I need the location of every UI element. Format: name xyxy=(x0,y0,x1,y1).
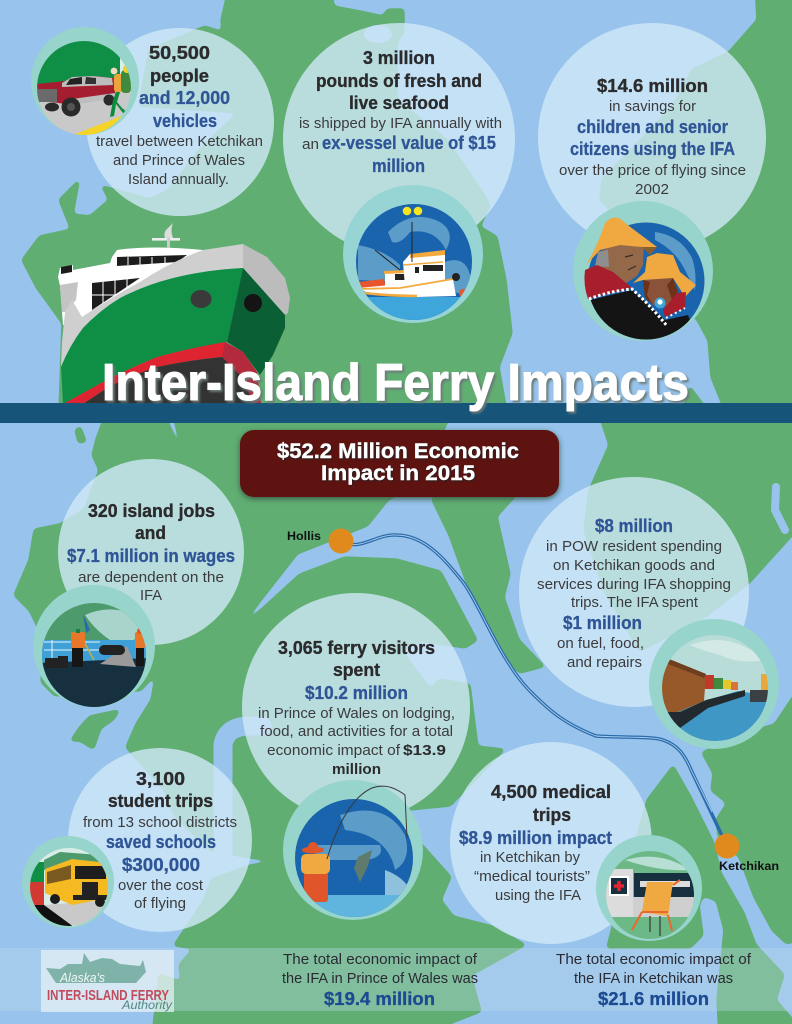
stat text: in POW resident spending xyxy=(546,538,722,555)
panel: student trips xyxy=(22,748,252,932)
stat text: economic impact of xyxy=(267,742,401,759)
stat text: of flying xyxy=(134,895,186,912)
panel: children and senior savings xyxy=(538,23,766,345)
stat text: $13.9 xyxy=(403,742,446,759)
map: inland water channels xyxy=(223,25,785,860)
stat text: an xyxy=(302,136,319,153)
panel: ferry visitors xyxy=(242,593,470,925)
bubble xyxy=(538,23,766,251)
stat text: in savings for xyxy=(609,98,696,115)
stat text: in Prince of Wales on lodging, xyxy=(258,705,455,722)
stat text: and Prince of Wales xyxy=(113,152,245,169)
title: Inter-Island Ferry Impacts xyxy=(102,354,689,412)
stat text: million xyxy=(372,156,425,176)
Hollis marker: Hollis xyxy=(287,529,321,543)
bubble xyxy=(68,748,252,932)
stat text: 3,065 ferry visitors xyxy=(278,638,435,658)
economic impact callout: $52.2 Million Economic xyxy=(277,440,519,463)
stat text: over the cost xyxy=(118,877,204,894)
stat text: trips xyxy=(533,805,571,825)
bubble xyxy=(519,477,749,707)
Ketchikan total: the IFA in Ketchikan was xyxy=(574,970,733,987)
stat text: people xyxy=(150,66,209,86)
stat text: 3,100 xyxy=(136,769,185,789)
logo: Inter-Island Ferry Authority xyxy=(41,950,174,1012)
icon: fishing boat xyxy=(343,185,483,327)
icon: elder and child in woven hats xyxy=(573,201,713,345)
logo: Inter-Island Ferry Authority: Alaska's xyxy=(59,970,105,985)
icon: ambulance and wheelchair xyxy=(596,835,702,945)
stat text xyxy=(459,782,612,904)
economic impact callout: Impact in 2015 xyxy=(321,462,475,485)
stat text: million xyxy=(332,761,381,778)
stat text xyxy=(559,76,746,198)
stat text: from 13 school districts xyxy=(83,814,237,831)
stat text: using the IFA xyxy=(495,887,581,904)
stat text: on Ketchikan goods and xyxy=(553,557,715,574)
ferry illustration xyxy=(58,223,290,404)
Ketchikan marker: Ketchikan xyxy=(719,859,779,873)
stat text: $1 million xyxy=(563,613,642,633)
panel: people and vehicles xyxy=(30,27,274,216)
panel: seafood xyxy=(283,23,515,327)
stat text: $8 million xyxy=(595,516,673,536)
panel: island jobs xyxy=(33,459,244,712)
stat text: “medical tourists” xyxy=(474,868,590,885)
stat text: services during IFA shopping xyxy=(537,576,731,593)
Prince of Wales total xyxy=(282,951,478,1009)
stat text: student trips xyxy=(108,791,213,811)
icon: school bus xyxy=(22,836,115,930)
stat text xyxy=(537,516,731,671)
bubble xyxy=(86,28,274,216)
logo: Inter-Island Ferry Authority: INTER-ISLAND FERRY xyxy=(47,987,169,1004)
icon: deck workers xyxy=(33,585,155,712)
stat text: trips. The IFA spent xyxy=(571,594,699,611)
stat text xyxy=(67,501,235,604)
Ketchikan marker xyxy=(714,834,779,873)
bubble xyxy=(450,742,652,944)
stat text: $7.1 million in wages xyxy=(67,546,235,566)
stat text: over the price of flying since xyxy=(559,162,746,179)
stat text: vehicles xyxy=(153,111,217,131)
stat text: IFA xyxy=(140,587,162,604)
Prince of Wales total: The total economic impact of xyxy=(283,951,478,968)
title banner bar xyxy=(0,403,792,423)
logo: Inter-Island Ferry Authority: Authority xyxy=(121,998,173,1012)
stat text: $14.6 million xyxy=(597,76,708,96)
stat text: children and senior xyxy=(577,117,728,137)
bubble xyxy=(283,23,515,255)
stat text: saved schools xyxy=(106,832,216,852)
icon: truck and hiker xyxy=(30,27,140,140)
Ketchikan total: $21.6 million xyxy=(598,989,709,1009)
stat text: is shipped by IFA annually with xyxy=(299,115,502,132)
stat text: Island annually. xyxy=(128,171,229,188)
stat text: 50,500 xyxy=(149,43,210,63)
panel: medical trips xyxy=(450,742,702,945)
stat text: citizens using the IFA xyxy=(570,139,735,159)
panel: Ketchikan spending xyxy=(519,477,779,749)
ferry route line xyxy=(342,535,725,842)
stat text: 2002 xyxy=(635,181,669,198)
stat text: $300,000 xyxy=(122,855,200,875)
stat text: food, and activities for a total xyxy=(260,723,453,740)
stat text xyxy=(83,769,237,912)
stat text: on fuel, food, xyxy=(557,635,644,652)
Hollis marker xyxy=(287,528,354,554)
bubble xyxy=(58,459,244,645)
stat text xyxy=(299,48,502,176)
stat text: spent xyxy=(333,660,380,680)
stat text: 3 million xyxy=(363,48,435,68)
icon: Ketchikan waterfront xyxy=(649,619,779,749)
Prince of Wales total: $19.4 million xyxy=(324,989,435,1009)
stat text xyxy=(96,43,263,188)
Prince of Wales total: the IFA in Prince of Wales was xyxy=(282,970,478,987)
stat text: live seafood xyxy=(349,93,449,113)
stat text: are dependent on the xyxy=(78,569,224,586)
stat text: travel between Ketchikan xyxy=(96,133,263,150)
stat text: ex-vessel value of $15 xyxy=(322,133,496,153)
stat text: $8.9 million impact xyxy=(459,828,612,848)
stat text: and 12,000 xyxy=(139,88,230,108)
icon: fisherman xyxy=(283,780,423,925)
stat text: and xyxy=(135,523,166,543)
stat text xyxy=(258,638,455,778)
bubble xyxy=(242,593,470,821)
stat text: pounds of fresh and xyxy=(316,71,482,91)
stat text: and repairs xyxy=(567,654,642,671)
Ketchikan total xyxy=(556,951,752,1009)
bottom translucent strip xyxy=(0,948,792,1011)
economic impact callout xyxy=(240,430,559,497)
stat text: 4,500 medical xyxy=(491,782,611,802)
stat text: 320 island jobs xyxy=(88,501,215,521)
Ketchikan total: The total economic impact of xyxy=(556,951,752,968)
stat text: in Ketchikan by xyxy=(480,849,580,866)
stat text: $10.2 million xyxy=(305,683,408,703)
